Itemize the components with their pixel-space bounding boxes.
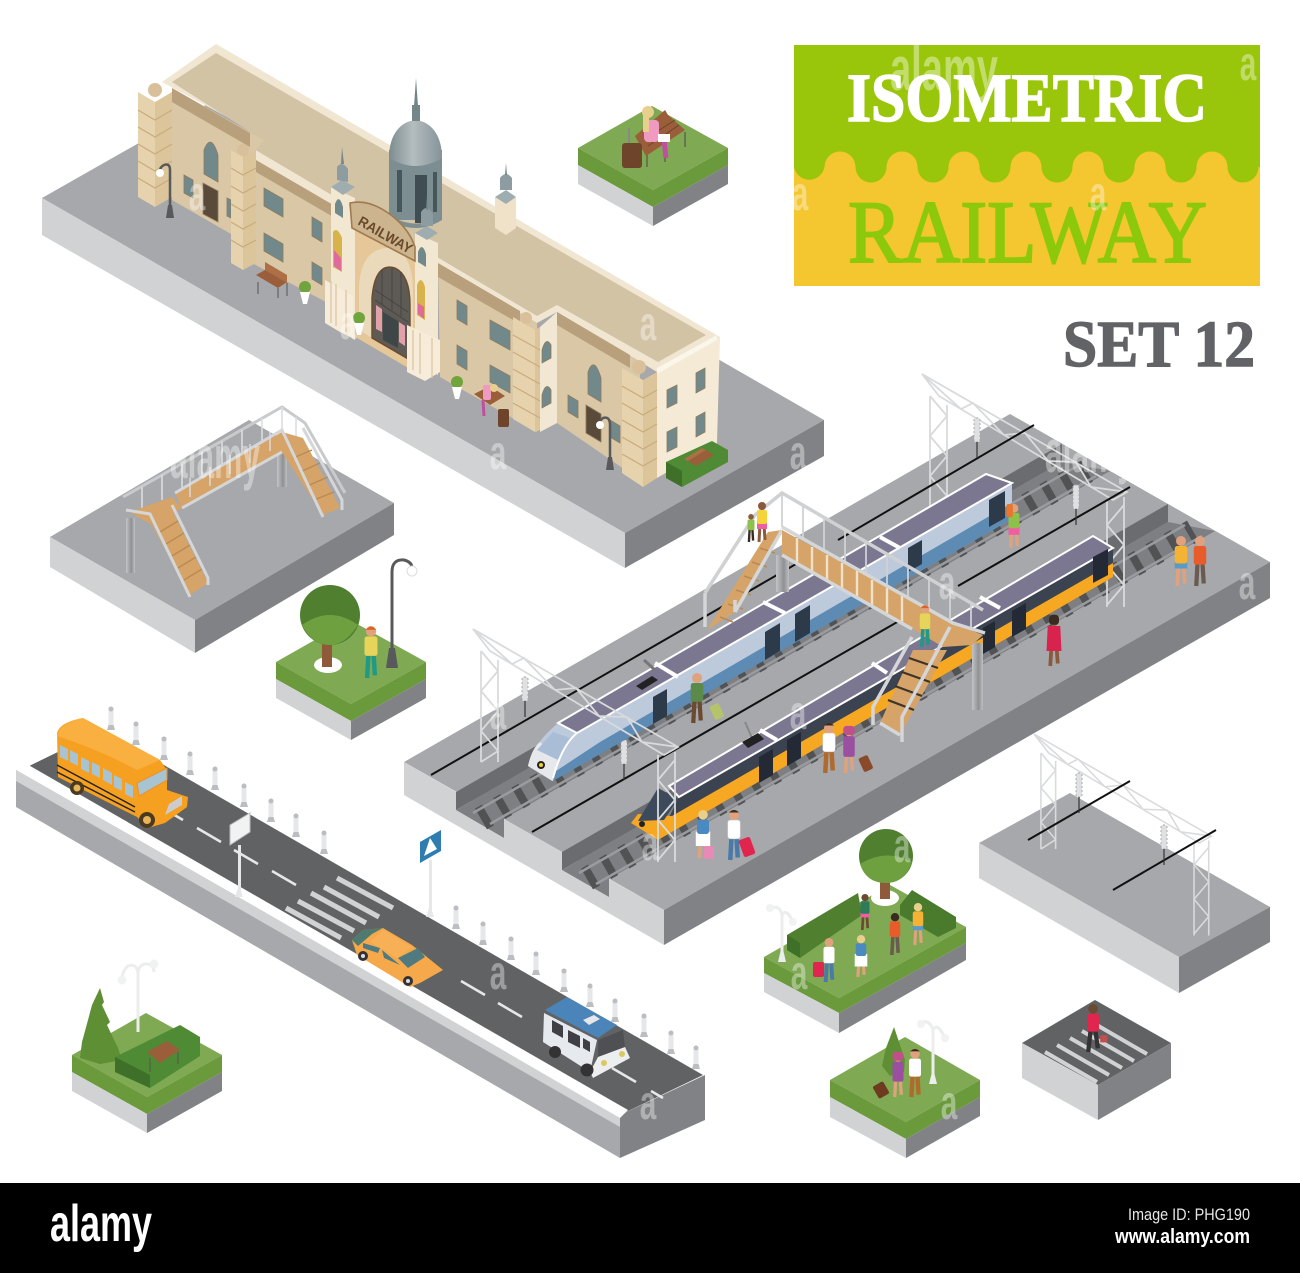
bench <box>256 262 287 298</box>
spruce <box>882 1027 905 1076</box>
watermark: a <box>894 820 911 873</box>
people <box>872 1049 921 1099</box>
track 2 <box>562 504 1215 897</box>
third turret <box>495 163 516 235</box>
bench <box>147 1041 180 1072</box>
curb <box>16 763 628 1118</box>
watermark: a <box>640 1077 657 1130</box>
blue train <box>528 474 1012 781</box>
watermark: a <box>1240 38 1257 91</box>
tree and lamp block <box>276 560 426 740</box>
yellow train <box>631 536 1113 840</box>
lane dashes <box>171 813 663 1098</box>
gantry right platform <box>1034 734 1211 936</box>
watermark: a <box>1090 168 1107 221</box>
columns <box>126 452 287 573</box>
footbridge <box>123 407 345 597</box>
track 1 <box>456 444 1110 838</box>
roof <box>162 44 720 372</box>
watermark: a <box>640 298 657 351</box>
hedge <box>115 1025 200 1088</box>
watermark: alamy <box>1045 418 1135 485</box>
footer logo: alamy <box>50 1195 152 1253</box>
back railing <box>123 407 345 497</box>
walls <box>172 88 720 480</box>
tree <box>859 829 913 906</box>
right stairs <box>873 627 950 742</box>
railway people front <box>691 673 873 860</box>
footer bar <box>0 1183 1300 1273</box>
plant pots <box>299 281 463 399</box>
crossing sign <box>420 830 441 917</box>
overhead wires right platform <box>1028 781 1216 890</box>
watermark: alamy <box>170 424 260 491</box>
title: railway: RAILWAY <box>848 184 1207 282</box>
watermark: a <box>792 168 809 221</box>
crosswalk <box>286 878 393 938</box>
watermark: a <box>941 1077 958 1130</box>
van <box>543 997 630 1078</box>
title: isometric: ISOMETRIC <box>847 60 1207 136</box>
footbridge block <box>50 407 394 653</box>
park block <box>764 829 966 1033</box>
station platform base <box>42 85 824 568</box>
watermark: a <box>490 687 507 740</box>
hedge bench <box>666 441 728 487</box>
watermark: a <box>340 297 357 350</box>
people on bridge <box>748 502 930 647</box>
bench block <box>578 106 728 226</box>
crossing stripes <box>1045 1024 1147 1082</box>
road sign <box>230 813 250 897</box>
watermark: a <box>790 427 807 480</box>
bench and woman <box>622 106 685 168</box>
railway people back <box>1006 504 1206 666</box>
dome <box>389 78 442 228</box>
title banner <box>794 35 1260 286</box>
entrance <box>325 147 440 381</box>
watermark: a <box>939 557 956 610</box>
bollards <box>107 706 700 1069</box>
spruce <box>80 988 122 1064</box>
left tower <box>325 147 355 340</box>
railway platform <box>404 414 1270 945</box>
lamps <box>156 165 614 470</box>
footbridge main <box>705 493 985 742</box>
windows <box>184 142 705 452</box>
lamp <box>766 904 797 962</box>
station building <box>138 44 728 487</box>
watermark: a <box>490 427 507 480</box>
insulators <box>522 418 1079 780</box>
insulators right platform <box>1076 773 1167 865</box>
crossing block <box>1022 1000 1171 1120</box>
watermark: a <box>189 168 206 221</box>
gantry back <box>922 374 1127 607</box>
watermark: a <box>1239 557 1256 610</box>
watermark: a <box>791 947 808 1000</box>
front railing <box>126 428 342 597</box>
road block <box>16 706 705 1158</box>
columns <box>776 555 983 710</box>
woman on bench and suitcase <box>474 384 509 427</box>
pedestrian <box>1087 1004 1107 1052</box>
back railing <box>705 493 983 630</box>
overhead wires <box>431 425 1130 832</box>
taxi <box>352 928 443 987</box>
platform 3 block <box>979 793 1270 993</box>
watermark <box>170 38 1257 1130</box>
pilasters <box>138 83 657 487</box>
sign: RAILWAY <box>356 213 416 257</box>
website: www.alamy.com <box>1114 1226 1250 1248</box>
arch <box>359 248 413 362</box>
right tower <box>407 195 440 381</box>
image id: Image ID: PHG190 <box>1128 1205 1250 1224</box>
gantry front <box>473 629 678 862</box>
spruce bench block <box>72 960 222 1133</box>
person <box>364 626 378 678</box>
watermark: a <box>490 947 507 1000</box>
deck <box>130 432 340 595</box>
watermark: a <box>642 818 659 871</box>
road surface <box>25 730 703 1113</box>
hedges <box>787 890 956 958</box>
title banner: alamy <box>890 35 998 104</box>
left stairs <box>705 530 782 630</box>
set label: SET 12 <box>1063 308 1255 381</box>
watermark: a <box>790 687 807 740</box>
school bus <box>57 718 188 828</box>
lamp <box>917 1020 949 1084</box>
sign <box>350 202 416 261</box>
people block <box>830 1020 980 1158</box>
tree <box>300 585 360 673</box>
deck <box>782 527 985 647</box>
people <box>813 894 923 982</box>
lamp <box>118 960 158 1032</box>
lamp <box>386 560 417 668</box>
